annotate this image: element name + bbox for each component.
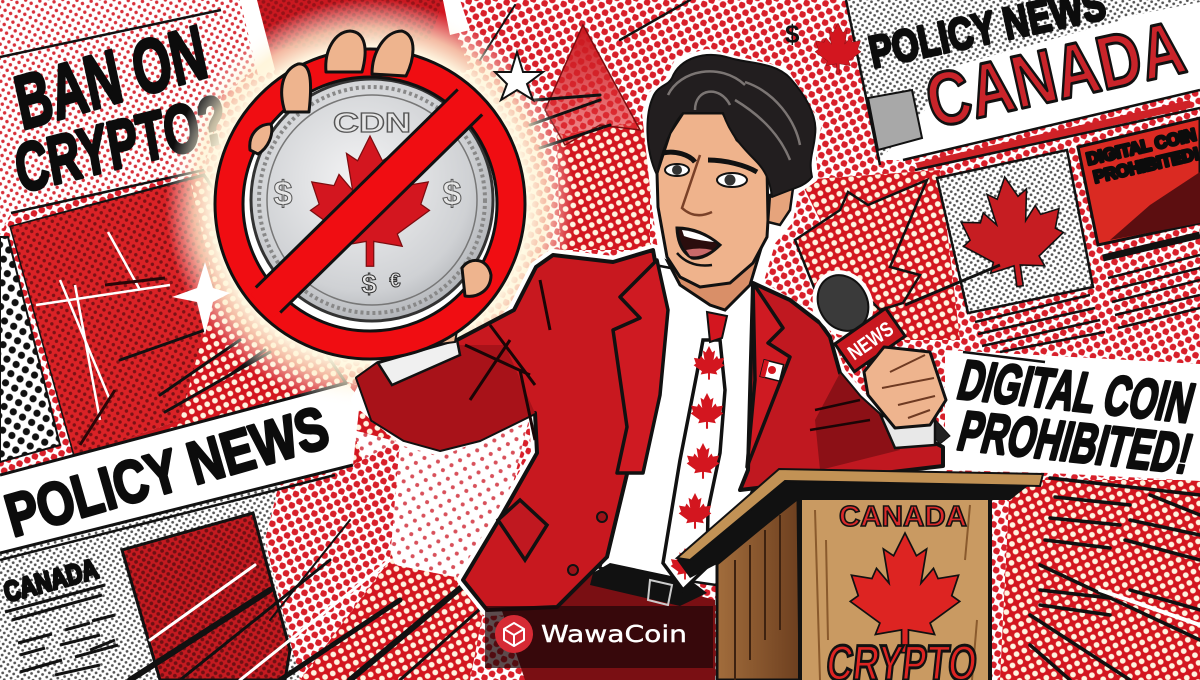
panel: bottom-left newspaper (0, 383, 400, 680)
panel: red box with digital coin headline: DIGITAL COIN (1085, 125, 1198, 169)
logo: WawaCoin: WawaCoin (541, 622, 687, 648)
podium side (717, 497, 800, 680)
heading: BAN ON CRYPTO?: CRYPTO? (9, 81, 232, 208)
panel: DIGITAL COIN PROHIBITED banner (945, 348, 1200, 485)
coin glow (165, 0, 575, 409)
heading: CANADA: CANADA (1, 553, 101, 608)
face (657, 113, 768, 287)
podium top (677, 469, 1043, 578)
panel: top red peak (545, 25, 640, 145)
palm under coin (358, 315, 460, 352)
podium (677, 469, 1043, 680)
hair (647, 55, 815, 197)
coin with prohibition sign (229, 63, 511, 345)
icon: red cube (495, 615, 533, 653)
panel: red box with digital coin headline (1078, 118, 1200, 245)
logo: WawaCoin (485, 606, 713, 668)
panel: top-right newspaper masthead (846, 0, 1200, 170)
flag pin (760, 360, 784, 381)
panel: maple leaf box (937, 150, 1093, 313)
panel: left red illustrated panel (11, 175, 346, 457)
grey square (868, 90, 922, 150)
coin with prohibition sign: $ (361, 269, 377, 299)
lapels (613, 260, 790, 473)
ear (768, 188, 793, 225)
sleeve shading and folds (357, 345, 535, 450)
white outline (357, 55, 943, 610)
red spark behind the speaker (795, 180, 1000, 310)
column lines right (975, 235, 1200, 352)
buttons (597, 512, 607, 522)
coin lettering: CDN (333, 107, 411, 138)
coin with prohibition sign: $ (443, 175, 462, 213)
cuff (881, 416, 935, 448)
icon: sparkle (172, 262, 230, 335)
podium front (800, 497, 990, 680)
panel: top-left newspaper headline (0, 0, 470, 235)
microphone: NEWS (844, 317, 898, 365)
icon: coin maple leaf (310, 136, 430, 266)
speed lines (120, 0, 690, 680)
microphone (805, 263, 950, 444)
icon: white star (495, 52, 543, 100)
panel: top-left black halftone strip (0, 237, 60, 462)
shirt cuff (378, 340, 460, 385)
fist (864, 347, 946, 428)
belt (590, 563, 707, 606)
neck and collar (668, 235, 765, 310)
silver coin (251, 79, 493, 321)
prohibition ring and slash (229, 63, 511, 345)
brows, eyes, nose (663, 152, 757, 215)
trousers (500, 570, 715, 680)
heading: BAN ON CRYPTO? (8, 9, 232, 208)
jacket (357, 250, 943, 610)
fingers gripping the top of the coin (250, 31, 491, 296)
ring inner background (240, 74, 500, 334)
podium label CANADA: CANADA (839, 501, 967, 533)
icon: podium maple leaf (850, 533, 960, 653)
heading: POLICY NEWS: POLICY NEWS (0, 394, 336, 549)
man in red suit (357, 55, 950, 680)
pocket (498, 500, 547, 560)
coin with prohibition sign: € (389, 270, 401, 292)
coin with prohibition sign: $ (274, 175, 293, 213)
tie (663, 312, 727, 590)
icon: top dollar and leaf (785, 19, 861, 73)
red picture (122, 513, 290, 680)
open mouth (677, 228, 720, 266)
column lines (5, 585, 118, 675)
shirt (600, 265, 760, 585)
icon: top dollar and leaf: $ (785, 19, 800, 49)
right lower speed lines (1030, 478, 1200, 680)
